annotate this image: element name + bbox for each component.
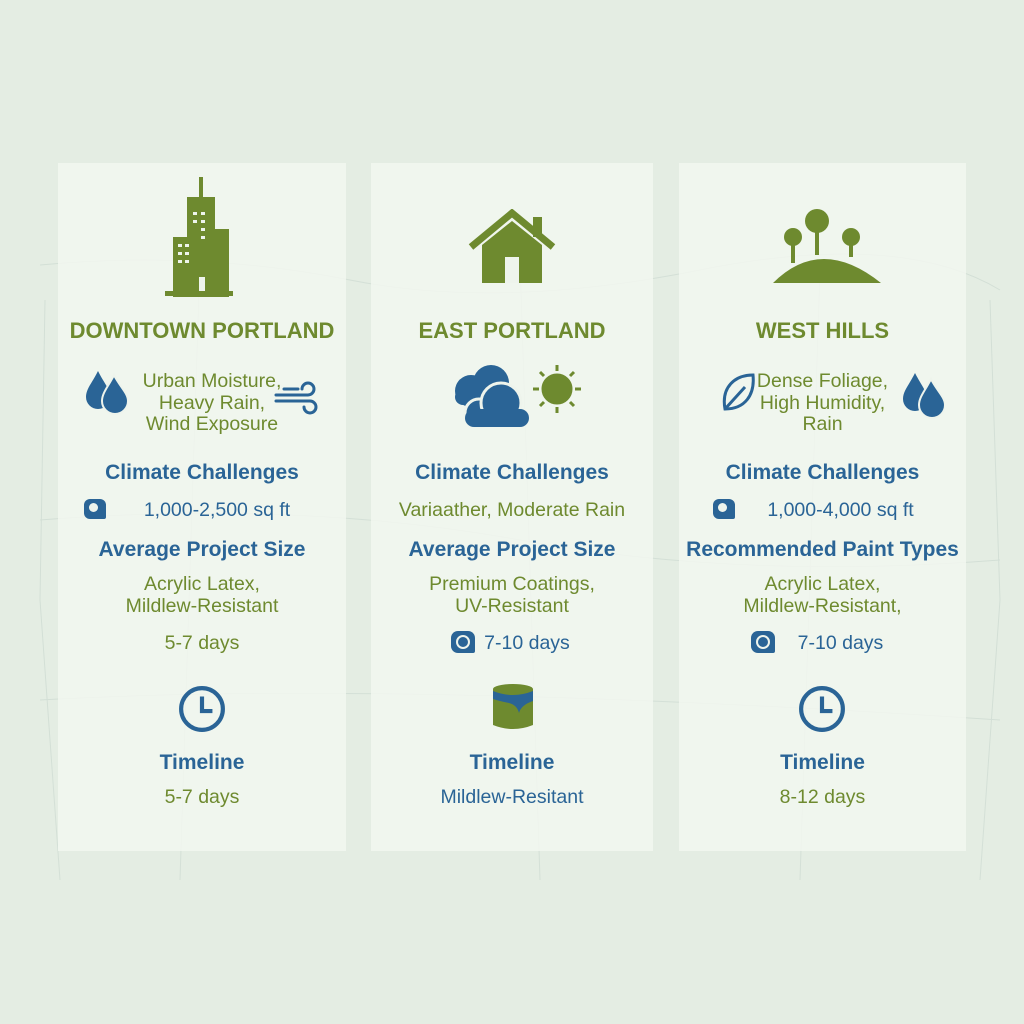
challenge text: Rain bbox=[802, 413, 843, 435]
icon: paint can bbox=[493, 684, 533, 729]
challenge text bbox=[143, 370, 281, 435]
icon: rain drops bbox=[903, 373, 944, 417]
panel: West Hills bbox=[679, 163, 966, 851]
heading: recommended paint types: Recommended Paint Types bbox=[686, 538, 959, 561]
panel: Downtown Portland bbox=[58, 163, 346, 851]
duration: 5-7 days bbox=[165, 632, 239, 654]
challenge text: Wind Exposure bbox=[146, 413, 278, 435]
title: WEST HILLS bbox=[756, 318, 889, 343]
paint types: Mildlew-Resistant bbox=[126, 594, 278, 616]
duration: 7-10 days bbox=[798, 632, 883, 654]
project size: 1,000-2,500 sq ft bbox=[144, 499, 290, 521]
icon: wind bbox=[274, 382, 318, 414]
heading: average project size: Average Project Size bbox=[408, 538, 616, 561]
paint types: Acrylic Latex, bbox=[765, 573, 880, 595]
heading: timeline: Timeline bbox=[160, 751, 244, 774]
heading: climate challenges: Climate Challenges bbox=[415, 461, 609, 484]
title: DOWNTOWN PORTLAND bbox=[70, 318, 334, 343]
duration bbox=[451, 631, 570, 654]
heading: average project size: Average Project Size bbox=[98, 538, 306, 561]
icon: hills with trees bbox=[773, 209, 881, 283]
timeline value: 8-12 days bbox=[780, 786, 865, 808]
icon: cloud and sun bbox=[455, 365, 581, 427]
duration: 7-10 days bbox=[484, 632, 570, 654]
paint types: Mildlew-Resistant, bbox=[743, 594, 902, 616]
paint types bbox=[126, 573, 278, 616]
paint types: Acrylic Latex, bbox=[144, 573, 260, 595]
panel: East Portland bbox=[371, 163, 653, 851]
challenge text bbox=[757, 370, 888, 435]
paint types: UV-Resistant bbox=[455, 594, 569, 616]
paint types bbox=[429, 573, 595, 616]
paint types: Premium Coatings, bbox=[429, 573, 595, 595]
challenge text: Dense Foliage, bbox=[757, 370, 888, 392]
icon: rain drops bbox=[86, 371, 127, 413]
challenge text: Variaather, Moderate Rain bbox=[399, 499, 625, 521]
paint types bbox=[743, 573, 902, 616]
challenge text: High Humidity, bbox=[760, 392, 885, 414]
heading: timeline: Timeline bbox=[470, 751, 554, 774]
heading: climate challenges: Climate Challenges bbox=[105, 461, 299, 484]
title: EAST PORTLAND bbox=[418, 318, 606, 343]
icon: clock bbox=[179, 686, 225, 732]
timeline value: 5-7 days bbox=[165, 786, 239, 808]
heading: timeline: Timeline bbox=[780, 751, 865, 774]
challenge text: Urban Moisture, bbox=[143, 370, 281, 392]
icon: clock bbox=[799, 686, 845, 732]
project size: 1,000-4,000 sq ft bbox=[767, 499, 914, 521]
icon: skyscrapers bbox=[165, 177, 233, 297]
icon: leaf bbox=[722, 374, 755, 410]
timeline value: Mildlew-Resitant bbox=[440, 786, 584, 808]
duration bbox=[751, 631, 883, 654]
challenge text: Heavy Rain, bbox=[159, 392, 265, 414]
icon: house bbox=[468, 209, 556, 283]
heading: climate challenges: Climate Challenges bbox=[726, 461, 919, 484]
